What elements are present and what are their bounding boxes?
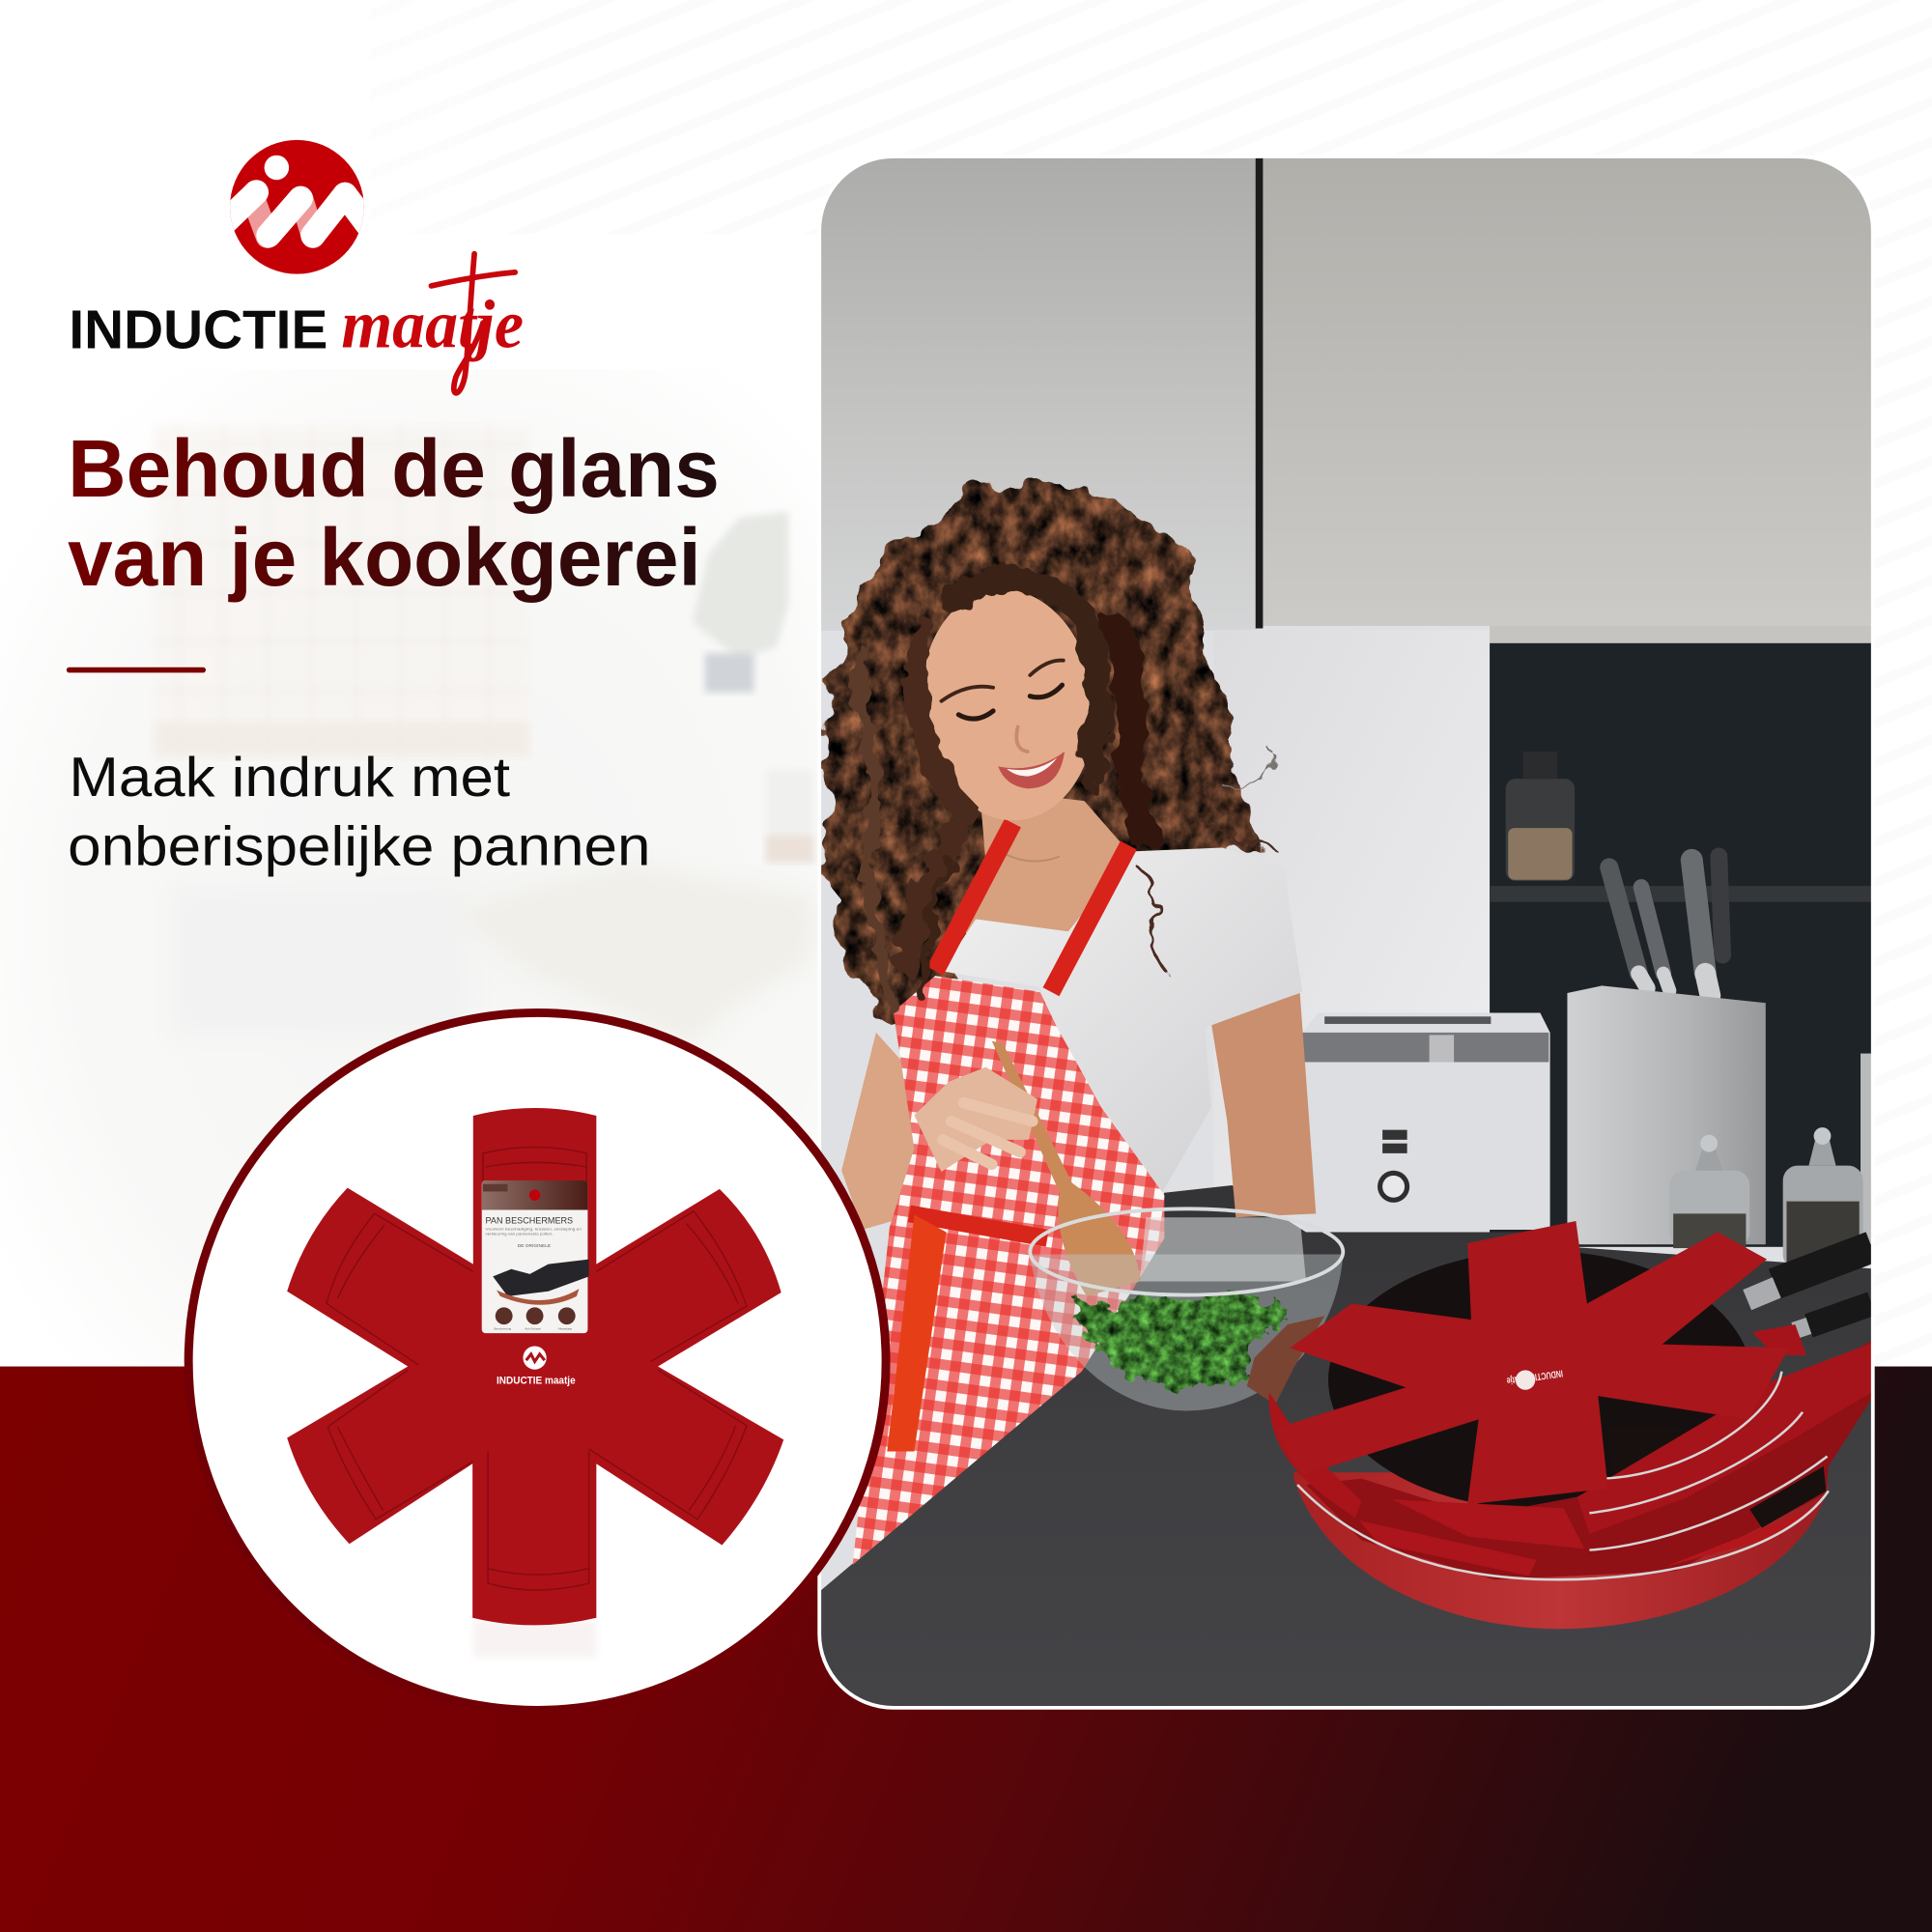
logo (69, 140, 524, 393)
subheading: Maak indruk met (69, 747, 510, 809)
subheading (68, 747, 650, 877)
steel rims (1297, 1372, 1829, 1579)
wooden spoon (992, 1041, 1140, 1296)
countertop (813, 1185, 1879, 1713)
apron straps (935, 823, 1128, 992)
toaster (1302, 1012, 1550, 1230)
glass jars (1669, 1127, 1863, 1269)
teeth (1007, 757, 1057, 777)
background: faint diagonal lines (370, 0, 1932, 1368)
felt logo (1506, 1367, 1563, 1390)
cabinet gap (1256, 156, 1263, 629)
panel: kitchen photo (813, 156, 1879, 1713)
star logo: INDUCTIE maatje (497, 1375, 576, 1386)
product card: DE ORIGINELE (518, 1243, 551, 1248)
lower felt stack (1306, 1341, 1872, 1579)
front hair curls (860, 581, 1275, 1005)
pan stack (1269, 1221, 1872, 1629)
product card: Bescherming (494, 1326, 512, 1330)
necklace (998, 850, 1060, 862)
heading: Behoud de glans (68, 423, 720, 514)
face (910, 581, 1106, 829)
star logo (497, 1346, 576, 1386)
circle disc (188, 1012, 886, 1710)
lettuce (1069, 1292, 1289, 1390)
small felt by handle (1752, 1324, 1806, 1355)
bottom red pan (1293, 1472, 1829, 1629)
logo mark (222, 140, 375, 274)
shelf (1490, 886, 1873, 902)
logo wordmark maatje: maatje (341, 287, 524, 363)
eyes and brows (941, 661, 1064, 752)
right appliance (1861, 1053, 1871, 1244)
spice jar on shelf (1506, 752, 1575, 881)
back hair (823, 483, 1262, 1029)
woman (823, 483, 1316, 1565)
lighter felt strips (1359, 1499, 1584, 1576)
star inner layer outlines (327, 1148, 747, 1590)
top felt protector (1276, 1221, 1789, 1504)
felt logo: INDUCTIE maatje (1506, 1367, 1563, 1385)
dark backsplash (1490, 643, 1873, 1247)
glass bowl (1030, 1208, 1343, 1410)
under-cabinet strip (1490, 626, 1873, 643)
circle: product (188, 1012, 886, 1710)
left felt edge (1269, 1392, 1361, 1518)
smile (998, 752, 1065, 788)
apron (853, 976, 1164, 1565)
panel border (819, 156, 1873, 1708)
t-shirt (941, 848, 1302, 1195)
product card: PAN BESCHERMERS (486, 1215, 573, 1226)
bowl hand (1247, 1316, 1324, 1405)
pan interior dark (1328, 1251, 1752, 1509)
upper cabinet left (819, 156, 1257, 631)
white fridge panel (1213, 630, 1490, 1012)
heading: van je kookgerei (68, 512, 701, 603)
product card (482, 1180, 589, 1333)
divider (67, 668, 206, 672)
heading (68, 423, 720, 603)
product card: Anti-Schade (525, 1326, 541, 1330)
apron belt (909, 1213, 1047, 1238)
felt star protector (287, 1108, 783, 1625)
knife block (1567, 985, 1766, 1244)
dark gaps in stack (1608, 1428, 1826, 1528)
apron ribbon (887, 1215, 947, 1452)
neck and chest (949, 788, 1127, 949)
logo wordmark inductie: INDUCTIE (69, 299, 327, 360)
knife handles (1609, 856, 1722, 996)
wall (821, 626, 1871, 1590)
left arm (841, 1033, 934, 1230)
product card: Voorkom beschadiging, krassen, versleping en (486, 1228, 582, 1232)
upper cabinet right (1263, 156, 1873, 626)
background: ghosted kitchen photo (0, 370, 819, 1368)
stirring hand (914, 1067, 1037, 1172)
felt star reflection (473, 1620, 596, 1658)
product card: Afwasbaar (558, 1326, 572, 1330)
bottom dark red band (0, 1367, 1932, 1932)
pan handles (1775, 1247, 1872, 1284)
product card: verkleuring van pannensets potten. (486, 1233, 554, 1236)
subheading: onberispelijke pannen (68, 815, 650, 877)
right arm (1211, 993, 1316, 1217)
logo wordmark maatje (341, 254, 524, 393)
